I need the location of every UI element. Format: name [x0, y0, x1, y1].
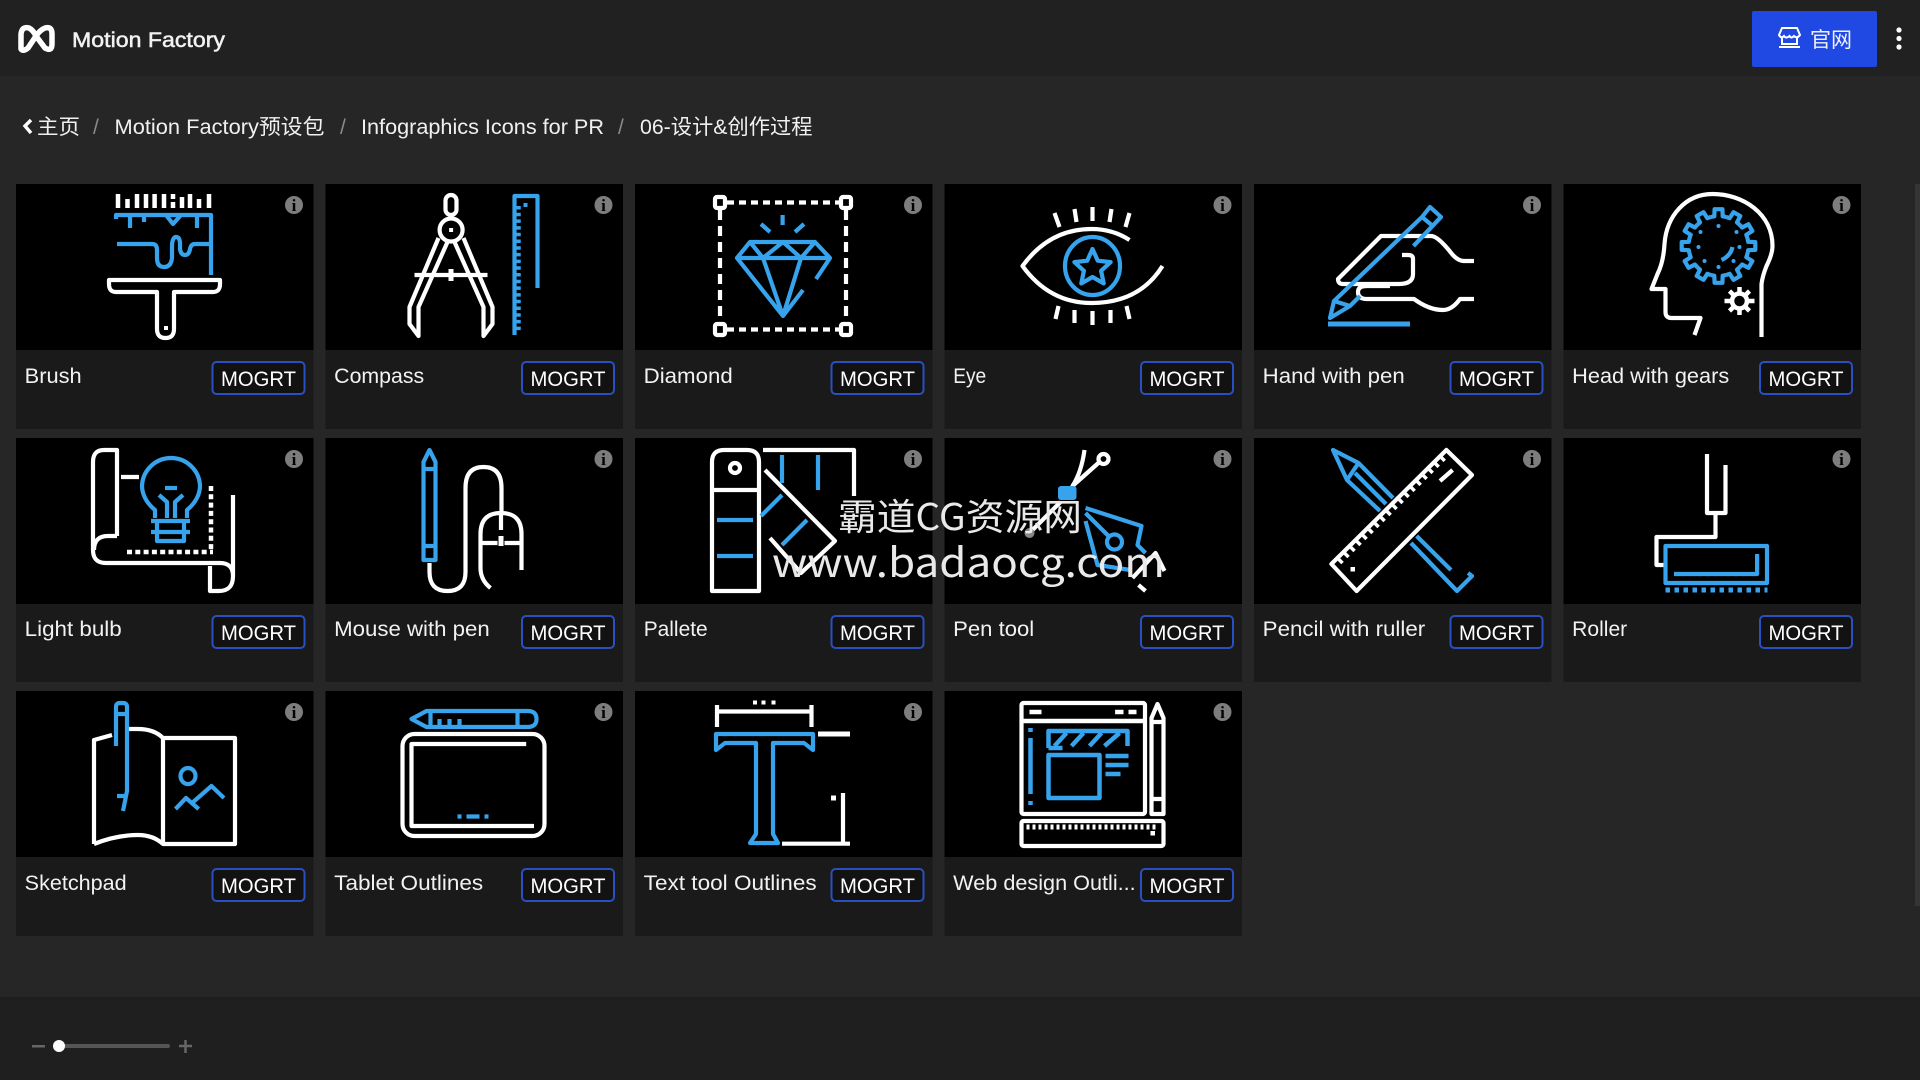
breadcrumb category: Infographics Icons for PR: [361, 116, 604, 139]
icon: tablet and stylus: [402, 711, 544, 836]
icon: compass: [410, 195, 538, 336]
MOGRT button: [522, 362, 614, 394]
watermark: 霸道CG资源网: [838, 487, 1082, 541]
MOGRT button: MOGRT: [1150, 368, 1225, 391]
label: Sketchpad: [25, 872, 127, 895]
info icon: i: [601, 703, 606, 722]
breadcrumb home: 主页: [37, 116, 80, 139]
slider minus: [32, 1045, 45, 1048]
icon: sketchpad: [94, 703, 235, 844]
label: Roller: [1572, 618, 1627, 641]
label: Brush: [25, 365, 82, 388]
card: Eye: [944, 184, 1242, 429]
info icon: [594, 196, 612, 215]
info icon: [1523, 450, 1541, 469]
info icon: [285, 196, 303, 215]
info icon: [1832, 450, 1850, 469]
MOGRT button: MOGRT: [221, 368, 296, 391]
card: Web design Outli...: [944, 691, 1242, 936]
info icon: [1214, 703, 1232, 722]
card: Pen tool: [944, 438, 1242, 682]
info icon: i: [292, 703, 297, 722]
button text: 官网: [1810, 29, 1852, 52]
label: Hand with pen: [1263, 365, 1405, 388]
icon: paint roller: [1656, 454, 1768, 590]
icon: pen tool: [1024, 450, 1164, 591]
icon: eye: [1022, 207, 1162, 325]
card: Roller: [1564, 438, 1861, 682]
MOGRT button: [1141, 362, 1233, 394]
info icon: [1214, 196, 1232, 215]
MOGRT button: [1141, 869, 1233, 901]
card: Diamond: [635, 184, 932, 429]
card: Sketchpad: [16, 691, 314, 936]
card: Hand with pen: [1254, 184, 1552, 429]
watermark: [772, 487, 1165, 589]
label: Pallete: [644, 618, 708, 641]
MOGRT button: [832, 616, 924, 648]
info icon: i: [911, 196, 916, 215]
info icon: [285, 450, 303, 469]
MOGRT button: [212, 616, 304, 648]
label: Light bulb: [25, 618, 122, 641]
icon: diamond: [715, 197, 851, 335]
info icon: i: [1839, 196, 1844, 215]
info icon: i: [292, 196, 297, 215]
info icon: [1832, 196, 1850, 215]
MOGRT button: MOGRT: [840, 622, 915, 645]
card: Mouse with pen: [326, 438, 623, 682]
separator: /: [340, 116, 346, 139]
MOGRT button: [1760, 362, 1852, 394]
info icon: [904, 196, 922, 215]
MOGRT button: MOGRT: [1150, 875, 1225, 898]
info icon: [1523, 196, 1541, 215]
icon: Motion Factory logo: [21, 28, 52, 50]
info icon: i: [1220, 450, 1225, 469]
info icon: [594, 450, 612, 469]
MOGRT button: MOGRT: [840, 875, 915, 898]
label: Pen tool: [953, 618, 1034, 641]
icon: mouse with pen: [424, 450, 522, 591]
info icon: i: [911, 703, 916, 722]
MOGRT button: [1450, 362, 1542, 394]
icon: back chevron: [25, 120, 31, 133]
label: Mouse with pen: [334, 618, 490, 641]
info icon: i: [911, 450, 916, 469]
breadcrumb current: 06-设计&创作过程: [640, 116, 812, 139]
info icon: i: [1530, 196, 1535, 215]
MOGRT button: MOGRT: [221, 875, 296, 898]
card: Head with gears: [1564, 184, 1861, 429]
MOGRT button: MOGRT: [530, 368, 606, 391]
MOGRT button: MOGRT: [530, 622, 606, 645]
label: Web design Outli...: [953, 872, 1136, 895]
card: Tablet Outlines: [326, 691, 623, 936]
slider track: [59, 1044, 170, 1048]
breadcrumb: [25, 116, 812, 139]
brand name: Motion Factory: [72, 29, 226, 52]
card: Compass: [326, 184, 623, 429]
MOGRT button: MOGRT: [1768, 622, 1844, 645]
icon: hand with pen: [1328, 207, 1474, 326]
slider knob: [53, 1040, 65, 1052]
header bar: [0, 0, 1920, 76]
footer bar with size slider: [0, 997, 1920, 1080]
slider plus: [179, 1040, 192, 1053]
label: Diamond: [644, 365, 733, 388]
MOGRT button: MOGRT: [530, 875, 606, 898]
label: Head with gears: [1572, 365, 1729, 388]
icon: brush: [109, 194, 220, 338]
MOGRT button: [522, 869, 614, 901]
MOGRT button: [212, 869, 304, 901]
MOGRT button: [522, 616, 614, 648]
MOGRT button: MOGRT: [840, 368, 915, 391]
MOGRT button: [212, 362, 304, 394]
separator: /: [93, 116, 99, 139]
MOGRT button: MOGRT: [1768, 368, 1844, 391]
info icon: i: [1220, 703, 1225, 722]
info icon: i: [1839, 450, 1844, 469]
card: Text tool Outlines: [635, 691, 932, 936]
MOGRT button: MOGRT: [221, 622, 296, 645]
card: Light bulb: [16, 438, 314, 682]
info icon: i: [1530, 450, 1535, 469]
icon: head with gears: [1652, 194, 1772, 337]
info icon: [904, 703, 922, 722]
MOGRT button: [832, 362, 924, 394]
label: Tablet Outlines: [334, 872, 483, 895]
card: Pallete: [635, 438, 932, 682]
icon: palette: [712, 450, 854, 591]
icon: pencil with ruler: [1331, 450, 1472, 591]
icon: light bulb blueprint: [93, 450, 233, 591]
icon: text tool: [716, 700, 850, 844]
MOGRT button: [1141, 616, 1233, 648]
info icon: [904, 450, 922, 469]
icon: more menu: [1896, 27, 1902, 50]
label: Eye: [953, 365, 986, 388]
card: Pencil with ruller: [1254, 438, 1552, 682]
icon: store: [1779, 28, 1800, 47]
info icon: [594, 703, 612, 722]
button: official site: [1752, 11, 1877, 67]
MOGRT button: [1450, 616, 1542, 648]
info icon: i: [601, 196, 606, 215]
info icon: [285, 703, 303, 722]
label: Pencil with ruller: [1263, 618, 1425, 641]
label: Text tool Outlines: [644, 872, 817, 895]
card: Brush: [16, 184, 314, 429]
info icon: [1214, 450, 1232, 469]
label: Compass: [334, 365, 424, 388]
separator: /: [618, 116, 624, 139]
scrollbar: [1915, 184, 1920, 906]
MOGRT button: MOGRT: [1459, 368, 1534, 391]
MOGRT button: [832, 869, 924, 901]
info icon: i: [601, 450, 606, 469]
watermark: www.badaocg.com: [772, 531, 1165, 589]
MOGRT button: [1760, 616, 1852, 648]
info icon: i: [292, 450, 297, 469]
MOGRT button: MOGRT: [1459, 622, 1534, 645]
icon: web design window: [1022, 703, 1164, 846]
MOGRT button: MOGRT: [1150, 622, 1225, 645]
breadcrumb pack: Motion Factory预设包: [114, 116, 324, 139]
info icon: i: [1220, 196, 1225, 215]
